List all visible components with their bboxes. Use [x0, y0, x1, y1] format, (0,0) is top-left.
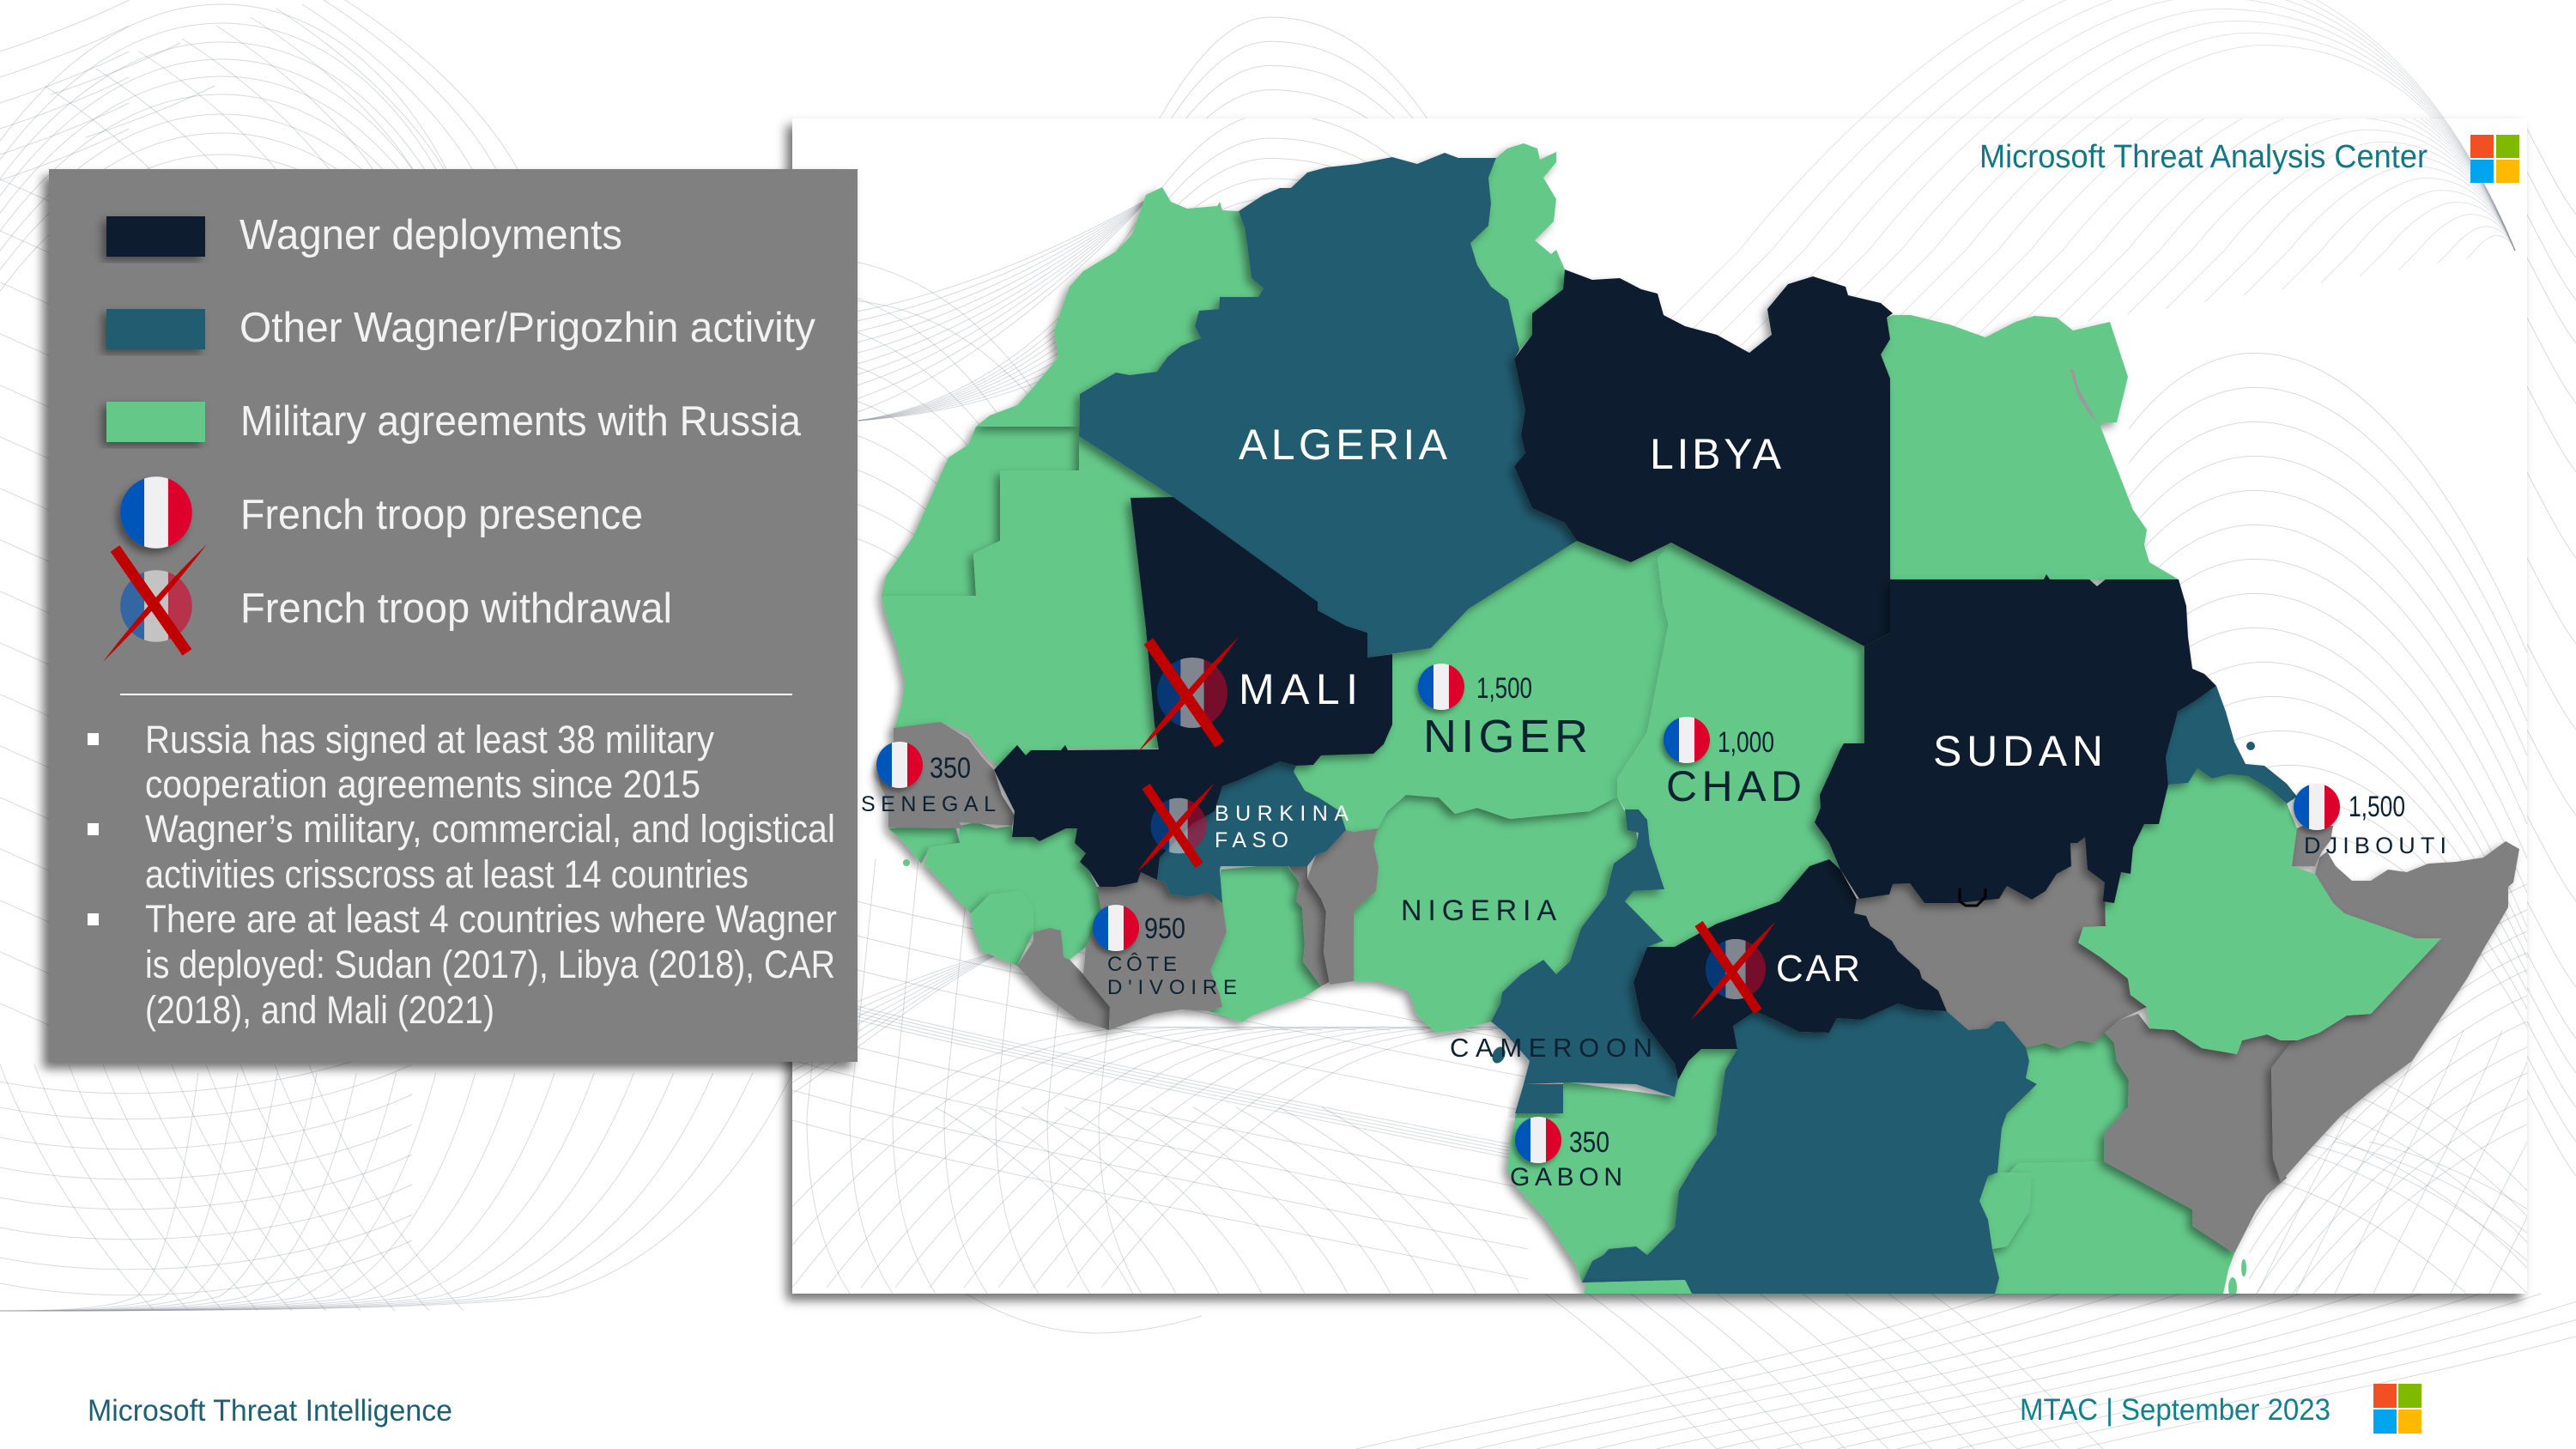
country: Chad	[1617, 543, 1864, 947]
country: Mauritania	[882, 436, 1173, 768]
country: Democratic Republic of the Congo	[1582, 1003, 2037, 1294]
label: Nigeria: NIGERIA	[1401, 894, 1556, 927]
Abyei outline	[1960, 888, 1985, 906]
country: Togo	[1288, 866, 1332, 986]
country: Niger	[1294, 541, 1671, 832]
country: Nigeria	[1354, 795, 1639, 1033]
label: Gabon: GABON	[1510, 1163, 1622, 1191]
country: Angola strip	[1584, 1280, 1692, 1294]
label: Senegal: SENEGAL	[861, 792, 996, 816]
flag: Djibouti	[2294, 784, 2340, 830]
country: Guinea	[924, 822, 1102, 960]
panel: map background	[792, 118, 2527, 1294]
troop presence markers	[876, 664, 2405, 1163]
country: Burkina Faso	[1157, 761, 1346, 903]
country: Libya	[1514, 270, 1893, 646]
country: Liberia	[1017, 928, 1110, 1030]
islands: Zanzibar and Pemba	[2228, 1259, 2246, 1298]
country: Gabon and Congo	[1507, 1049, 1737, 1282]
troop count: Djibouti: 1,500	[2349, 791, 2405, 823]
label: Cameroon: CAMEROON	[1450, 1033, 1652, 1063]
troop count: Côte d'Ivoire: 950	[1144, 912, 1185, 945]
Gulf of Suez	[2070, 368, 2097, 422]
legend text: French troop withdrawal: French troop withdrawal	[240, 585, 672, 632]
label: Côte d'Ivoire: D'IVOIRE	[1107, 976, 1237, 999]
country: Central African Republic	[1633, 859, 1947, 1080]
legend swatch: Wagner deployments	[106, 216, 205, 257]
label: Chad: CHAD	[1666, 762, 1802, 810]
bullet: crisscrossing activities	[88, 807, 835, 896]
country: Guinea-Bissau and Gambia	[888, 822, 960, 864]
country: Tanzania	[1992, 1161, 2234, 1294]
label: Niger: NIGER	[1423, 711, 1588, 762]
bullet: military agreements: Russia has signed at least 38 military	[145, 718, 714, 761]
label: Algeria: ALGERIA	[1239, 421, 1448, 469]
country: Ghana	[1209, 864, 1321, 1022]
label: Sudan: SUDAN	[1933, 727, 2103, 775]
country: Kenya	[2104, 1014, 2297, 1253]
country: South Sudan	[1854, 837, 2147, 1048]
withdrawal marker: CAR	[1691, 921, 1776, 1020]
panel: legend and key facts	[49, 169, 858, 1062]
country: Senegal	[877, 722, 1015, 828]
country: Uganda	[1997, 1033, 2129, 1173]
legend text: Wagner deployments: Wagner deployments	[239, 212, 622, 258]
country: Eritrea	[2166, 686, 2297, 803]
legend text: other activity: Other Wagner/Prigozhin activity	[239, 305, 815, 351]
country: Equatorial Guinea	[1515, 1084, 1563, 1113]
country: Côte d'Ivoire	[1083, 872, 1227, 1030]
country: Algeria	[1079, 153, 1577, 658]
country: Benin	[1307, 828, 1379, 985]
bullet: crisscrossing activities: activities crisscross at least 14 countries	[145, 852, 749, 896]
country: Mali and Guinea highlands	[994, 497, 1392, 887]
country: Djibouti	[2291, 826, 2333, 866]
bullet: military agreements	[88, 718, 714, 806]
bullet: deployed countries	[88, 897, 837, 1032]
country: Western Sahara	[882, 427, 1079, 596]
country: Ethiopia	[2078, 768, 2441, 1054]
country: Morocco	[976, 187, 1264, 427]
flag: Gabon	[1515, 1117, 1561, 1163]
legend flag: French troop withdrawal	[103, 544, 207, 662]
troop count: Chad: 1,000	[1718, 726, 1774, 759]
label: Côte d'Ivoire: CÔTE	[1107, 952, 1177, 976]
legend text: military agreements: Military agreements with Russia	[240, 398, 802, 445]
bullet: deployed countries: is deployed: Sudan (2017), Libya (2018), CAR	[145, 943, 835, 986]
legend swatch: military agreements	[106, 402, 205, 442]
label: Burkina Faso: FASO	[1215, 828, 1288, 852]
legend swatch: other activity	[106, 309, 205, 349]
withdrawal marker: Mali	[1137, 637, 1239, 753]
header: Microsoft Threat Analysis Center: Microsoft Threat Analysis Center	[1979, 139, 2428, 175]
legend flag: French troop presence	[120, 476, 192, 549]
country: Cameroon	[1491, 809, 1678, 1097]
flag: Senegal	[876, 742, 923, 788]
country: Sierra Leone	[971, 891, 1033, 966]
flag: Niger	[1418, 664, 1464, 710]
legend text: French troop presence: French troop presence	[240, 492, 643, 538]
bullet: deployed countries: There are at least 4 countries where Wagner	[145, 897, 837, 941]
label: CAR: CAR	[1776, 948, 1860, 990]
footer: MTAC date: MTAC | September 2023	[2020, 1393, 2331, 1427]
country: Rwanda and Burundi	[1979, 1173, 2032, 1249]
label: Libya: LIBYA	[1650, 430, 1782, 478]
flag: Côte d'Ivoire	[1093, 905, 1139, 951]
footer: Microsoft Threat Intelligence: Microsoft Threat Intelligence	[88, 1394, 452, 1428]
bullet: deployed countries: (2018), and Mali (2021)	[145, 988, 494, 1032]
label: Burkina Faso: BURKINA	[1215, 802, 1349, 826]
bullet: military agreements: cooperation agreements since 2015	[145, 762, 700, 806]
label: Mali: MALI	[1239, 665, 1358, 713]
island: Bioko	[1489, 1045, 1508, 1065]
map of northern Africa	[877, 143, 2519, 1298]
country: Somalia	[2271, 841, 2519, 1182]
icon: Microsoft logo top	[2470, 135, 2519, 183]
troop count: Niger: 1,500	[1476, 672, 1532, 705]
bullet: crisscrossing activities: Wagner’s military, commercial, and logistical	[145, 807, 835, 851]
country: Tunisia	[1470, 143, 1565, 350]
country: Sudan	[1815, 574, 2216, 903]
dot: Cape Verde side island	[903, 859, 910, 866]
mesh lines inside the map panel	[724, 0, 2576, 1382]
troop count: Gabon: 350	[1569, 1126, 1609, 1159]
withdrawal marker: Burkina Faso	[1137, 783, 1215, 872]
island: Dahlak	[2246, 742, 2255, 750]
country: Egypt	[1881, 315, 2179, 579]
country labels	[861, 421, 2446, 1191]
flag: Chad	[1664, 717, 1710, 763]
label: Djibouti: DJIBOUTI	[2304, 833, 2446, 858]
icon: Microsoft logo footer	[2373, 1384, 2421, 1434]
troop count: Senegal: 350	[930, 752, 971, 785]
